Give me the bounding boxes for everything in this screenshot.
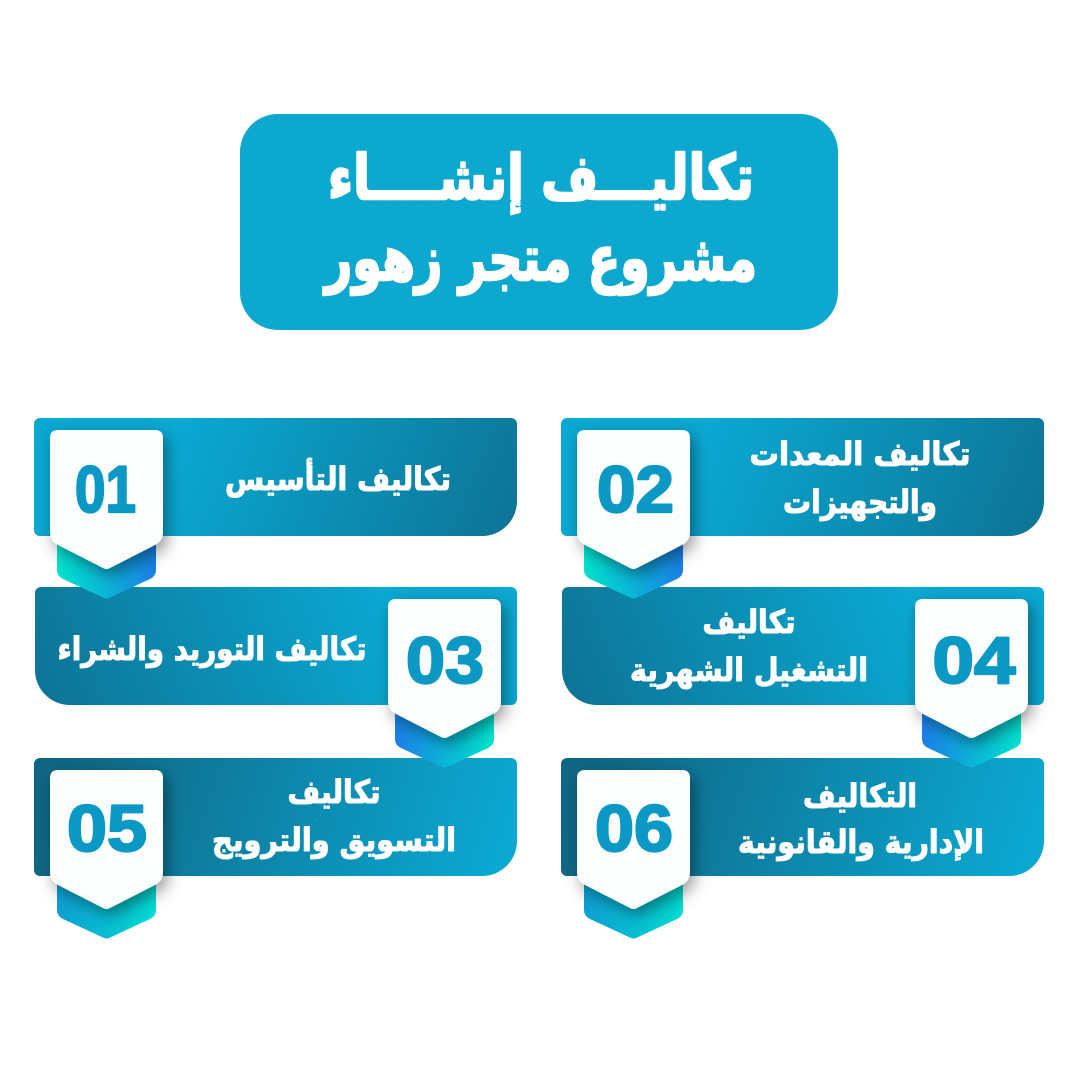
label 01: تكاليف التأسيس <box>225 458 451 498</box>
title panel <box>240 114 838 330</box>
card 01 <box>34 418 517 598</box>
title text: تكاليـــف إنشــــاء <box>328 141 754 214</box>
ribbon 01 <box>57 540 156 598</box>
label 03: تكاليف التوريد والشراء <box>58 630 366 668</box>
number 03: 03 <box>406 623 484 697</box>
title text <box>323 141 757 295</box>
number 04: 04 <box>932 623 1016 697</box>
label 05: تكاليف <box>288 773 380 811</box>
label 02 <box>750 435 970 521</box>
label 06: التكاليف <box>803 777 917 815</box>
badge 03 <box>388 599 501 738</box>
card 05 <box>34 758 517 938</box>
ribbon 06 <box>584 880 683 938</box>
label 05 <box>212 773 456 859</box>
card 03 <box>35 587 517 768</box>
badge 02 <box>577 430 690 569</box>
ribbon 03 <box>395 710 494 768</box>
card 04 <box>562 587 1044 768</box>
badge 04 <box>915 599 1028 738</box>
badge 06 <box>577 770 690 909</box>
label 04: تكاليف <box>702 603 796 641</box>
label 04: التشغيل الشهرية <box>630 651 868 689</box>
label 06: الإدارية والقانونية <box>738 823 984 861</box>
label 05: التسويق والترويج <box>212 821 456 859</box>
badge 05 <box>50 770 163 909</box>
number 01: 01 <box>75 452 136 526</box>
title text: مشروع متجر زهور <box>323 222 757 295</box>
ribbon 02 <box>584 540 683 598</box>
label 04 <box>630 603 868 689</box>
label 02: والتجهيزات <box>783 483 937 521</box>
ribbon 05 <box>57 880 156 938</box>
badge 01 <box>50 430 163 569</box>
card 06 <box>561 758 1044 938</box>
number 06: 06 <box>595 791 673 865</box>
label 06 <box>738 777 984 861</box>
number 02: 02 <box>597 452 674 526</box>
number 05: 05 <box>67 791 147 865</box>
card 02 <box>561 418 1044 598</box>
label 02: تكاليف المعدات <box>750 435 970 473</box>
ribbon 04 <box>922 710 1021 768</box>
